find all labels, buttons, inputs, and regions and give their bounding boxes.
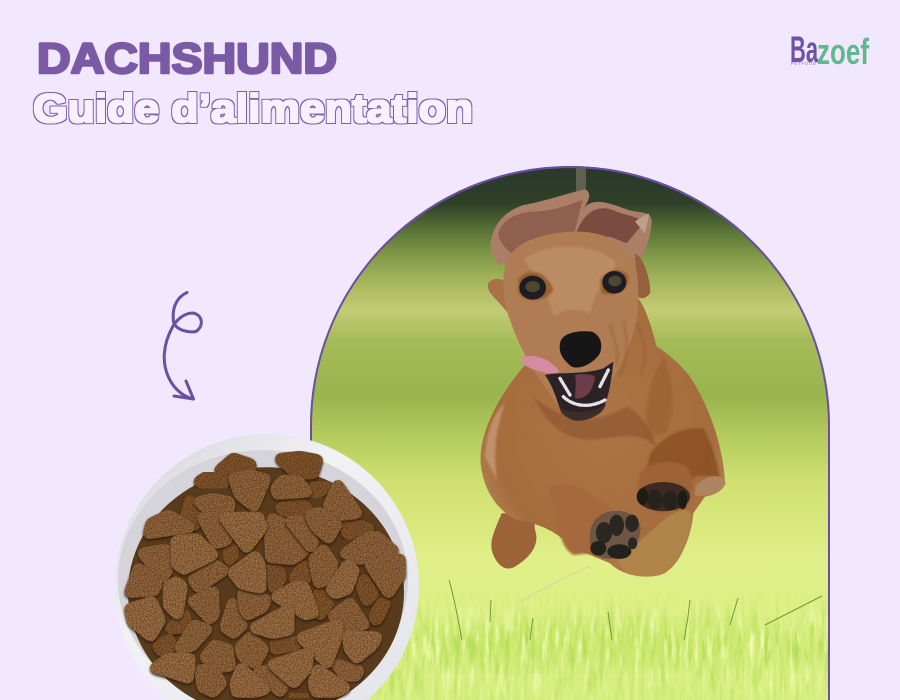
- logo word: zoef: zoef: [817, 31, 870, 72]
- dog eyes: [519, 271, 626, 300]
- subtitle: Guide d’alimentation: [33, 87, 473, 131]
- dog paw right: [637, 482, 690, 511]
- dog chest shading: [535, 399, 656, 445]
- bowl of kibble: [115, 434, 419, 700]
- dog paw left: [590, 511, 641, 559]
- bowl rim: [115, 434, 419, 700]
- logo: Bazoef: [790, 29, 870, 72]
- arch outline: [311, 167, 829, 700]
- dog belly highlight: [617, 510, 691, 577]
- dog neck wrinkles: [610, 320, 645, 377]
- dog head: [503, 231, 638, 417]
- photo: running dachshund in arch: [310, 166, 830, 700]
- kibble pile: [130, 457, 400, 697]
- logo tagline: PETFOOD: [791, 61, 817, 66]
- dog front leg right: [637, 462, 692, 513]
- bowl interior: [118, 450, 408, 700]
- dog body: [480, 297, 725, 577]
- dog brows: [518, 270, 628, 300]
- dog forehead: [523, 247, 617, 317]
- title: DACHSHUND: [37, 35, 337, 83]
- background post: [576, 166, 586, 192]
- dog ears: [488, 189, 652, 313]
- dog tongue: [521, 356, 559, 373]
- dog front leg left: [559, 536, 590, 556]
- dog rear leg: [491, 513, 536, 569]
- grass: [360, 566, 830, 700]
- dog: [480, 189, 726, 577]
- logo word: Ba: Ba: [790, 29, 818, 70]
- field background: [310, 166, 830, 700]
- arrow: curly pointing down to bowl: [164, 292, 201, 399]
- dog nose: [560, 331, 601, 368]
- dog mouth: [545, 362, 613, 421]
